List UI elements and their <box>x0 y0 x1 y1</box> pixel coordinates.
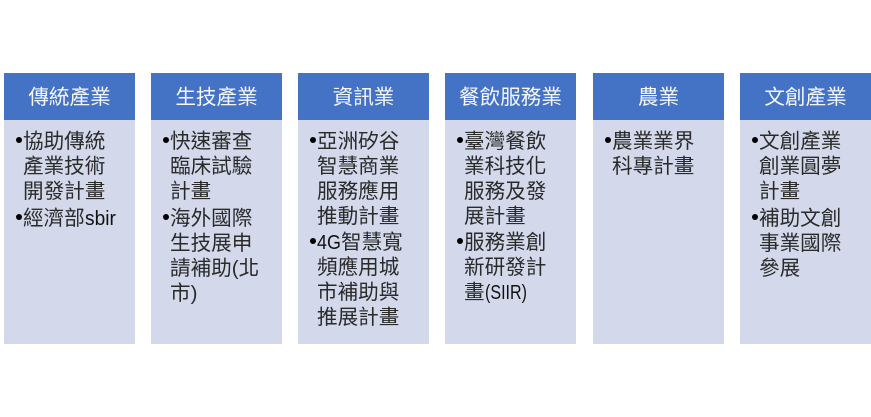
panel: 餐飲服務業 <box>445 73 576 344</box>
list item: 經濟部sbir <box>23 206 115 231</box>
list item: 4G智慧寬頻應用城市補助與推展計畫: 4G <box>317 230 341 254</box>
heading: 文創產業 <box>740 73 871 120</box>
list item: 亞洲矽谷智慧商業服務應用推動計畫: 亞洲矽谷 <box>317 130 399 153</box>
list item: 亞洲矽谷智慧商業服務應用推動計畫: 推動計畫 <box>317 205 399 228</box>
list item: 亞洲矽谷智慧商業服務應用推動計畫: 服務應用 <box>317 180 399 203</box>
list item: 服務業創新研發計畫(SIIR) <box>464 230 546 304</box>
panel: 資訊業 <box>298 73 429 344</box>
list item: 經濟部sbir: sbir <box>85 207 116 230</box>
list item: 文創產業創業圓夢計畫: 創業圓夢 <box>759 155 841 178</box>
list item: 4G智慧寬頻應用城市補助與推展計畫: 頻應用城 <box>317 256 399 278</box>
list item: 4G智慧寬頻應用城市補助與推展計畫: 推展計畫 <box>317 306 399 328</box>
list item: 臺灣餐飲業科技化服務及發展計畫: 服務及發 <box>464 180 546 203</box>
list item: 農業業界科專計畫: 科專計畫 <box>612 155 694 178</box>
list item: 快速審查臨床試驗計畫: 臨床試驗 <box>170 155 252 178</box>
heading: 文創產業: 文創產業 <box>764 86 847 109</box>
list item: 協助傳統產業技術開發計畫: 產業技術 <box>23 155 105 178</box>
list item: 快速審查臨床試驗計畫 <box>170 129 252 204</box>
heading: 農業 <box>593 73 724 120</box>
list: 農業 programs <box>593 120 724 344</box>
list: 餐飲服務業 programs <box>445 120 576 344</box>
list item: 補助文創事業國際參展: 事業國際 <box>759 232 841 255</box>
list: 資訊業 programs <box>298 120 429 344</box>
list item: 臺灣餐飲業科技化服務及發展計畫: 臺灣餐飲 <box>464 130 546 153</box>
panel: 文創產業 <box>740 73 871 344</box>
heading: 資訊業 <box>298 73 429 120</box>
heading: 餐飲服務業 <box>445 73 576 120</box>
list: 文創產業 programs <box>740 120 871 344</box>
panel: 農業 <box>593 73 724 344</box>
list item: 臺灣餐飲業科技化服務及發展計畫 <box>464 129 546 229</box>
heading: 農業: 農業 <box>638 86 679 109</box>
list item: 4G智慧寬頻應用城市補助與推展計畫: 市補助與 <box>317 280 399 304</box>
list item: 補助文創事業國際參展: 參展 <box>759 257 800 280</box>
heading: 傳統產業: 傳統產業 <box>28 86 111 109</box>
heading: 資訊業: 資訊業 <box>333 86 394 109</box>
list item: 協助傳統產業技術開發計畫: 開發計畫 <box>23 180 105 203</box>
list item: 海外國際生技展申請補助(北市): 生技展申 <box>170 232 252 255</box>
list item: 文創產業創業圓夢計畫 <box>759 129 841 204</box>
list item: 服務業創新研發計畫(SIIR): (SIIR) <box>485 280 527 304</box>
list item: 農業業界科專計畫 <box>612 129 694 179</box>
list item: 服務業創新研發計畫(SIIR): 服務業創 <box>464 230 546 254</box>
list item: 協助傳統產業技術開發計畫: 協助傳統 <box>23 130 105 153</box>
list item: 臺灣餐飲業科技化服務及發展計畫: 展計畫 <box>464 205 526 228</box>
list item: 海外國際生技展申請補助(北市) <box>170 206 259 306</box>
list item: 補助文創事業國際參展 <box>759 206 841 281</box>
list item: 補助文創事業國際參展: 補助文創 <box>759 207 841 230</box>
list item: 服務業創新研發計畫(SIIR): 畫 <box>464 280 485 304</box>
list item: 海外國際生技展申請補助(北市): 市) <box>170 282 197 305</box>
list item: 經濟部sbir: 經濟部 <box>23 207 85 230</box>
list item: 文創產業創業圓夢計畫: 文創產業 <box>759 130 841 153</box>
heading: 生技產業: 生技產業 <box>175 86 258 109</box>
panel: 傳統產業 <box>4 73 135 344</box>
list item: 4G智慧寬頻應用城市補助與推展計畫: 智慧寬 <box>341 230 403 254</box>
list item: 海外國際生技展申請補助(北市): 請補助(北 <box>170 257 259 280</box>
list item: 協助傳統產業技術開發計畫 <box>23 129 105 204</box>
list item: 快速審查臨床試驗計畫: 計畫 <box>170 180 211 203</box>
list item: 海外國際生技展申請補助(北市): 海外國際 <box>170 207 252 230</box>
list item: 農業業界科專計畫: 農業業界 <box>612 130 694 153</box>
list item: 快速審查臨床試驗計畫: 快速審查 <box>170 130 252 153</box>
list: 傳統產業 programs <box>4 120 135 344</box>
heading: 生技產業 <box>151 73 282 120</box>
list item: 亞洲矽谷智慧商業服務應用推動計畫 <box>317 129 399 229</box>
list: 生技產業 programs <box>151 120 282 344</box>
list item: 服務業創新研發計畫(SIIR): 新研發計 <box>464 256 546 278</box>
panel: 生技產業 <box>151 73 282 344</box>
list item: 文創產業創業圓夢計畫: 計畫 <box>759 180 800 203</box>
heading: 餐飲服務業: 餐飲服務業 <box>459 86 562 109</box>
list item: 臺灣餐飲業科技化服務及發展計畫: 業科技化 <box>464 155 546 178</box>
list item: 亞洲矽谷智慧商業服務應用推動計畫: 智慧商業 <box>317 155 399 178</box>
list item: 4G智慧寬頻應用城市補助與推展計畫 <box>317 230 403 330</box>
heading: 傳統產業 <box>4 73 135 120</box>
